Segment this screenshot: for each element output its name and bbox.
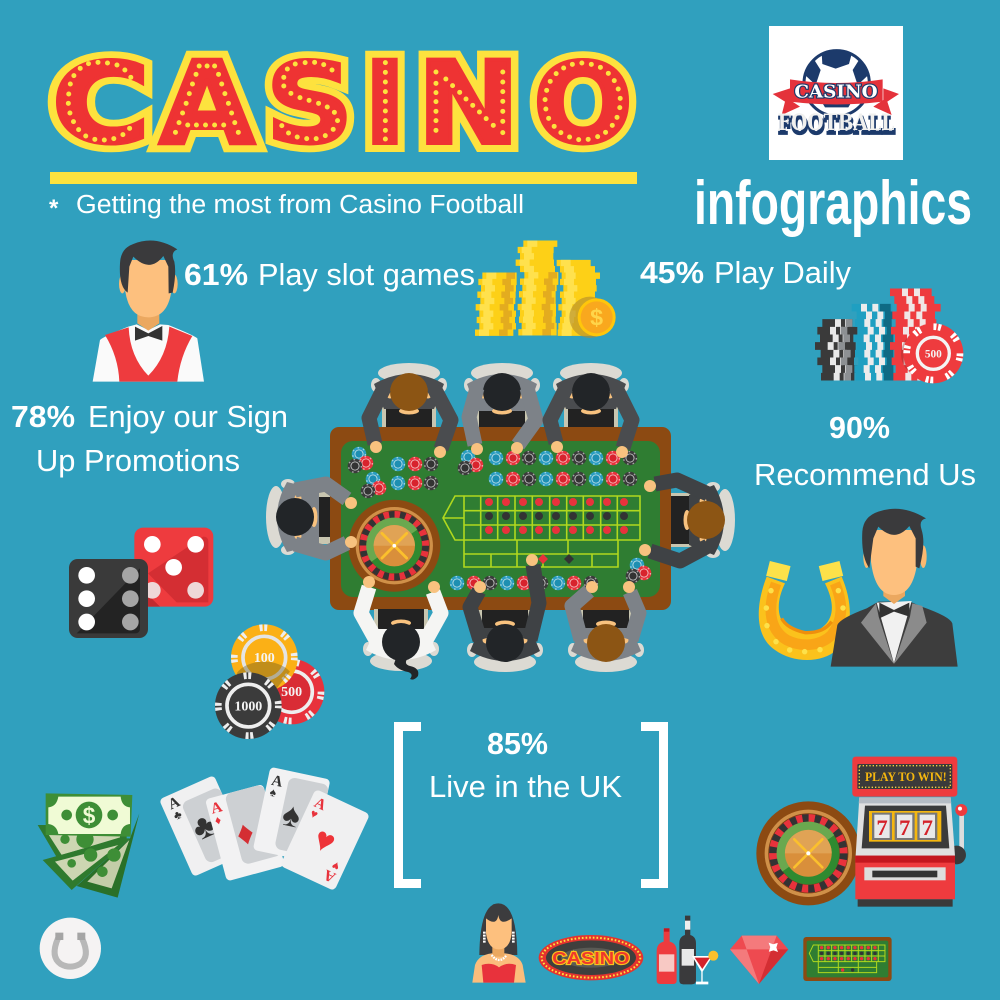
- player: bottom right: [568, 581, 644, 672]
- slot machine: 7: [922, 815, 933, 840]
- icon: chips 100 500 1000: 500: [281, 685, 302, 700]
- title: CASINO marquee: A: [159, 37, 255, 170]
- stat: 61% play slot games: Play slot games: [258, 258, 475, 292]
- stat: 45% play daily: 45%: [640, 256, 704, 290]
- icon: dealer: [93, 241, 204, 382]
- ace of hearts: [280, 789, 370, 891]
- man in tuxedo: [831, 509, 958, 667]
- icon: four aces: [159, 767, 370, 891]
- ace of hearts: ♥: [330, 858, 342, 874]
- stat: 90% recommend us: [754, 411, 976, 492]
- title: CASINO marquee: [52, 37, 633, 170]
- title: CASINO marquee: O: [533, 39, 633, 168]
- bracket: left: [398, 726, 421, 884]
- stat: 90% recommend us: 90%: [829, 411, 890, 445]
- icon: gold coin stacks: $: [590, 305, 603, 331]
- icon: ruby: [730, 936, 788, 984]
- ace of hearts: A: [321, 866, 338, 886]
- logo: Casino Football: CASINO: [794, 82, 878, 103]
- title: CASINO marquee: S: [266, 40, 353, 169]
- ace of hearts: ♥: [308, 820, 341, 862]
- icon: cash bills: [38, 793, 139, 898]
- slot machine: PLAY TO WIN!: [865, 770, 947, 784]
- ace of diamonds: [205, 784, 285, 881]
- stat: 85% live in the UK: Live in the UK: [429, 770, 622, 804]
- player: top right: [550, 363, 632, 458]
- title: CASINO marquee: N: [417, 37, 520, 170]
- ace of spades: ♠: [279, 796, 304, 836]
- icon: cash bills: $: [83, 802, 96, 828]
- ace of diamonds: ♦: [232, 814, 258, 854]
- ace of clubs: ♣: [187, 806, 222, 848]
- stat: 85% live in the UK: [429, 727, 622, 804]
- title underline: [50, 172, 637, 184]
- roulette wheel: [348, 500, 440, 592]
- icon: woman: [472, 903, 526, 983]
- bracket: right: [641, 726, 664, 884]
- ace of clubs: [159, 775, 248, 877]
- ace of spades: A: [270, 772, 284, 791]
- icon: mini roulette table: [803, 937, 892, 981]
- stat: 78% sign up promotions: [11, 400, 288, 478]
- subtitle: *: [49, 195, 59, 222]
- stat: 45% play daily: [640, 256, 852, 290]
- ace of spades: ♠: [268, 785, 278, 800]
- player: top left: [369, 363, 451, 458]
- chips on table: red: [360, 452, 650, 589]
- title: CASINO marquee: C: [52, 41, 150, 169]
- icon: gold coin stacks: [475, 244, 616, 338]
- player: bottom centre: [467, 554, 543, 672]
- ace of diamonds: A: [209, 798, 224, 818]
- chips on table: black: [349, 452, 639, 589]
- player: right: [639, 480, 735, 561]
- title: CASINO marquee: C: [52, 41, 150, 169]
- title: CASINO marquee: I: [364, 37, 406, 170]
- icon: horseshoe badge: [40, 918, 101, 979]
- icon: chips 100 500 1000: 1000: [234, 699, 262, 714]
- chips on table: blue: [353, 448, 643, 589]
- player: bottom left white shirt: [361, 576, 441, 680]
- stat: 85% live in the UK: 85%: [487, 727, 548, 761]
- bottom icon row: [472, 903, 892, 984]
- stat: 45% play daily: Play Daily: [714, 256, 852, 290]
- betting grid: [443, 496, 640, 567]
- title: CASINO marquee: A: [159, 37, 255, 170]
- roulette table: [266, 363, 735, 680]
- ace of diamonds: ♦: [213, 813, 223, 828]
- icon: casino chip stacks: 500: [925, 348, 942, 360]
- table frame: [330, 427, 671, 610]
- logo: Casino Football: FOOTBALL: [778, 110, 894, 136]
- title: CASINO marquee: S: [266, 40, 353, 169]
- subtitle: Getting the most from Casino Football: [76, 191, 524, 219]
- title: CASINO marquee: I: [364, 37, 406, 170]
- slot machine: 7: [876, 815, 888, 840]
- icon: casino chip stacks: [815, 292, 963, 383]
- logo: Casino Football: FOOTBALL: [778, 113, 895, 139]
- stat: 78% sign up promotions: Up Promotions: [36, 444, 240, 478]
- ace of hearts: A: [312, 794, 329, 814]
- roulette wheel: [756, 801, 860, 905]
- icon: slot machine and roulette wheel: [756, 757, 967, 907]
- stat: 78% sign up promotions: 78%: [11, 400, 75, 434]
- player: top centre: [464, 363, 540, 455]
- ace of clubs: ♣: [171, 807, 184, 823]
- ace of clubs: A: [166, 793, 183, 813]
- icon: bottles and cocktail: [657, 916, 718, 984]
- player: left: [266, 479, 357, 555]
- table felt: [341, 441, 660, 597]
- icon: dice: [69, 528, 213, 638]
- stat: 90% recommend us: Recommend Us: [754, 458, 976, 492]
- icon: chips 100 500 1000: 100: [254, 651, 275, 666]
- title: CASINO marquee: N: [417, 37, 520, 170]
- icon: casino sign: [539, 935, 643, 980]
- stat: 78% sign up promotions: Enjoy our Sign: [88, 400, 288, 434]
- ace of spades: [253, 767, 330, 862]
- slot machine: 7: [899, 815, 910, 840]
- icon: horseshoe and tuxedo man: [759, 509, 958, 667]
- icon: casino sign: CASINO: [552, 948, 630, 968]
- slot machine: [852, 757, 967, 907]
- icon: chips 100 500 1000: [215, 624, 324, 739]
- title: CASINO marquee: O: [533, 39, 633, 168]
- stat: 61% play slot games: 61%: [184, 258, 248, 292]
- horseshoe: [759, 561, 850, 660]
- ace of hearts: ♥: [308, 806, 320, 822]
- logo: Casino Football: [769, 26, 903, 160]
